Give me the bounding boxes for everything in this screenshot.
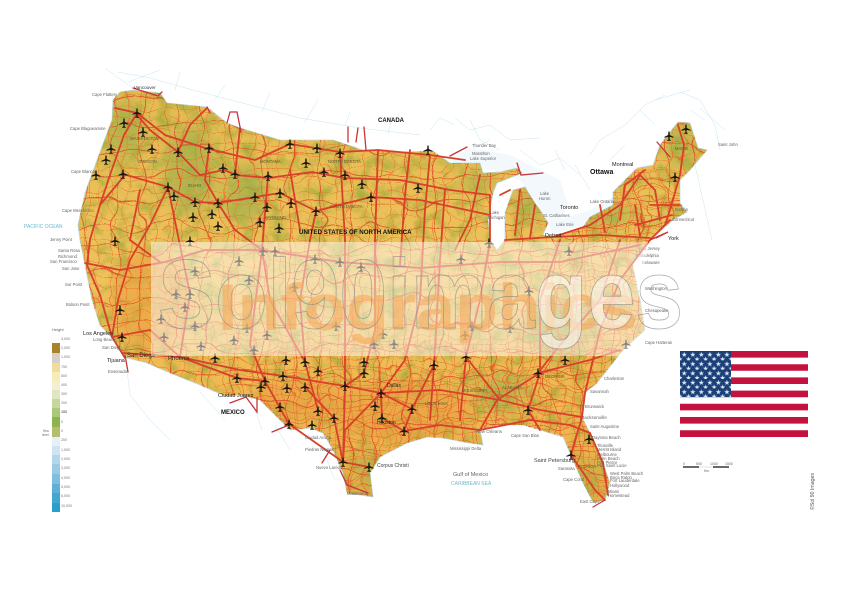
city and place labels: Boston xyxy=(675,207,689,212)
legend values: 1,000 xyxy=(61,448,70,452)
city and place labels: Cape Blagueamine xyxy=(70,126,106,131)
terrain land area xyxy=(78,90,707,502)
scale bar: 500 xyxy=(696,462,702,466)
city and place labels: Ciudad Acuña xyxy=(305,435,332,440)
city and place labels: SOUTH DAKOTA xyxy=(330,204,363,209)
city and place labels: MAINE xyxy=(675,146,688,151)
city and place labels: Vancouver xyxy=(134,85,156,90)
city and place labels: Cape Flattery xyxy=(92,92,118,97)
legend values: 2,000 xyxy=(61,346,70,350)
city and place labels: Detroit xyxy=(545,233,562,239)
legend values xyxy=(61,337,72,508)
city and place labels: Homestead xyxy=(608,493,630,498)
city and place labels: Phoenix xyxy=(168,356,190,362)
elevation legend xyxy=(42,327,72,512)
city and place labels: Cape San Blas xyxy=(511,433,539,438)
scale bar: 1000 xyxy=(710,462,718,466)
legend colour ramp xyxy=(52,343,60,512)
legend values: 10,000 xyxy=(61,504,72,508)
watermark: Sol90images: Sol90images xyxy=(158,239,683,349)
city and place labels: Lake Erie xyxy=(556,222,574,227)
city and place labels: Santa Rosa xyxy=(58,248,81,253)
city and place labels: Mississippi Delta xyxy=(450,446,482,451)
city and place labels: Melbourne xyxy=(597,452,617,457)
map of the United States xyxy=(24,68,738,508)
scale bar: 1500 xyxy=(725,462,733,466)
label: Canada: CANADA xyxy=(378,118,405,124)
city and place labels: Cape Hatteras xyxy=(645,340,672,345)
city and place labels: Long Beach xyxy=(93,337,116,342)
legend values: 0 xyxy=(61,420,63,424)
sea level note: level xyxy=(42,433,49,437)
sea level note: Sea xyxy=(43,429,49,433)
city and place labels: Huron xyxy=(539,196,551,201)
city and place labels: MONTANA xyxy=(260,159,281,164)
rivers and lakes of Canada xyxy=(105,68,725,480)
legend values: 750 xyxy=(61,365,67,369)
city and place labels: Corpus Christi xyxy=(377,463,409,469)
legend values: 3,000 xyxy=(61,337,70,341)
city and place labels: GEORGIA xyxy=(545,374,565,379)
city and place labels: Lake Ontario xyxy=(590,199,615,204)
city and place labels: LOUISIANA xyxy=(425,401,448,406)
border and roads beyond the land xyxy=(125,88,670,507)
city and place labels: Marathon xyxy=(472,151,490,156)
city and place labels: San Diego xyxy=(102,345,122,350)
city and place labels: Thunder Bay xyxy=(472,143,497,148)
city and place labels: Chesapeake xyxy=(645,308,669,313)
city and place labels: Palm Beach xyxy=(597,456,620,461)
city and place labels: Brunswick xyxy=(585,404,605,409)
city and place labels: Port Saint Lucie xyxy=(597,463,627,468)
city and place labels: NORTH DAKOTA xyxy=(328,159,361,164)
city and place labels: IDAHO xyxy=(188,183,202,188)
city and place labels: Sarasota xyxy=(558,466,575,471)
scale bar xyxy=(683,462,733,473)
Great Lakes water xyxy=(452,148,615,234)
legend values: 2,000 xyxy=(61,457,70,461)
city and place labels: Connecticut xyxy=(672,217,695,222)
legend values: 4,000 xyxy=(61,476,70,480)
label: Pacific Ocean: PACIFIC OCEAN xyxy=(24,224,63,230)
city and place labels: Ciudad Juarez xyxy=(218,393,254,399)
legend values: 200 xyxy=(61,438,67,442)
city and place labels: Charleston xyxy=(604,376,625,381)
city and place labels: Saint Petersburg xyxy=(534,458,575,464)
city and place labels: Toronto xyxy=(560,205,578,211)
legend values: 0 xyxy=(61,429,63,433)
scale bar: Km xyxy=(704,469,709,473)
airport icons xyxy=(91,108,691,472)
city and place labels: MISSISSIPPI xyxy=(462,388,487,393)
city and place labels: Savannah xyxy=(590,389,610,394)
flag of the United States xyxy=(680,351,808,437)
city and place labels: Lake xyxy=(540,191,550,196)
city and place labels: Montreal xyxy=(612,162,633,168)
city and place labels: Lake Superior xyxy=(470,156,497,161)
city and place labels: Ottawa xyxy=(590,169,613,176)
city and place labels: St. Catharines xyxy=(543,213,570,218)
city and place labels: Ensenada xyxy=(108,369,128,374)
city and place labels: Delaware xyxy=(642,260,660,265)
city and place labels: East Cape xyxy=(580,499,600,504)
city and place labels: FLORIDA xyxy=(578,464,596,469)
city and place labels: San Diego xyxy=(127,353,156,359)
city and place labels: Washington xyxy=(645,286,668,291)
city and place labels: Nuevo Laredo xyxy=(316,465,343,470)
label: Mexico: MEXICO xyxy=(221,410,245,416)
city and place labels: Jacksonville xyxy=(582,415,607,420)
city and place labels: Merritt Island xyxy=(597,447,622,452)
city and place labels: Tijuana xyxy=(107,358,126,364)
city and place labels: ALABAMA xyxy=(502,385,522,390)
label: Gulf of Mexico: Gulf of Mexico xyxy=(453,472,488,478)
city and place labels xyxy=(50,85,738,504)
city and place labels: Philadelphia xyxy=(636,253,659,258)
city and place labels: Houston xyxy=(377,420,396,426)
city and place labels: Dallas xyxy=(387,383,401,389)
city and place labels: West Palm Beach xyxy=(610,471,644,476)
city and place labels: Saint Augustine xyxy=(590,424,620,429)
city and place labels: San Francisco xyxy=(50,259,77,264)
city and place labels: Bolson Point xyxy=(66,302,90,307)
city and place labels: Jenny Point xyxy=(50,237,73,242)
city and place labels: Michigan xyxy=(488,215,505,220)
watermark: Infographics: Infographics xyxy=(218,270,638,344)
credit: ©Sol 90 Images xyxy=(809,473,816,510)
legend values: 500 xyxy=(61,374,67,378)
legend values: 3,000 xyxy=(61,466,70,470)
city and place labels: WASHINGTON xyxy=(130,136,159,141)
city and place labels: Fort Pierce xyxy=(597,460,618,465)
city and place labels: OREGON xyxy=(138,159,157,164)
legend values: 5,000 xyxy=(61,485,70,489)
city and place labels: Piedras Negras xyxy=(305,447,334,452)
city and place labels: Daytona Beach xyxy=(592,435,621,440)
city and place labels: Cape Coral xyxy=(563,477,584,482)
legend values: 100 xyxy=(61,410,67,414)
city and place labels: San Jose xyxy=(62,266,80,271)
city and place labels: Boca Raton xyxy=(610,475,633,480)
watermark band xyxy=(151,242,648,356)
legend values: 1,000 xyxy=(61,355,70,359)
city and place labels: Titusville xyxy=(597,443,614,448)
city and place labels: Sur Point xyxy=(65,282,83,287)
city and place labels: Fort Lauderdale xyxy=(610,478,640,483)
legend values: 6,000 xyxy=(61,494,70,498)
city and place labels: Cape Blanco xyxy=(71,169,96,174)
city and place labels: York xyxy=(668,236,679,242)
terrain relief and road mesh xyxy=(78,90,707,502)
city and place labels: WYOMING xyxy=(265,215,286,220)
legend values: 300 xyxy=(61,392,67,396)
city and place labels: New Jersey xyxy=(638,246,661,251)
main highways xyxy=(85,108,684,500)
city and place labels: Los Angeles xyxy=(83,331,113,337)
city and place labels: Saint John xyxy=(718,142,738,147)
label: United States of North America: UNITED STATES OF NORTH AMERICA xyxy=(299,229,412,236)
city and place labels: Hollywood xyxy=(610,483,630,488)
legend heading: Height xyxy=(52,327,64,332)
scale bar: 0 xyxy=(683,462,685,466)
city and place labels: New Orleans xyxy=(476,429,503,434)
city and place labels: Matamoros xyxy=(347,491,368,496)
city and place labels: Richmond xyxy=(58,254,78,259)
city and place labels: Lake xyxy=(490,210,500,215)
legend values: 400 xyxy=(61,383,67,387)
city and place labels: Miami xyxy=(608,489,619,494)
city and place labels: Cape Mendocino xyxy=(62,208,94,213)
label: Caribbean Sea: CARIBBEAN SEA xyxy=(451,481,492,487)
legend values: 200 xyxy=(61,401,67,405)
